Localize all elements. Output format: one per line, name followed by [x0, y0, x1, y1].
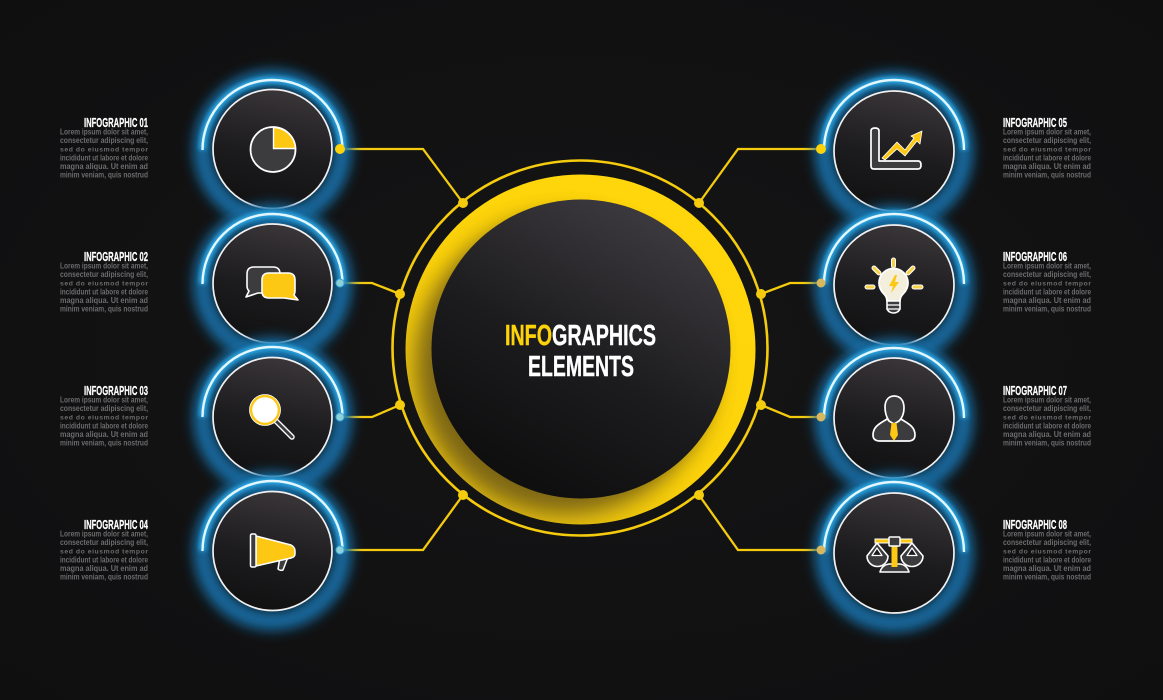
text block 02: minim veniam, quis nostrud	[60, 304, 148, 314]
disc shadow	[416, 214, 716, 514]
text block 04: INFOGRAPHIC 04	[84, 517, 148, 532]
text block 05	[1003, 115, 1091, 180]
text block 01: consectetur adipiscing elit,	[60, 136, 148, 145]
text block 02: INFOGRAPHIC 02	[84, 249, 148, 264]
text block 07: Lorem ipsum dolor sit amet,	[1003, 396, 1091, 404]
text block 06: Lorem ipsum dolor sit amet,	[1003, 262, 1091, 270]
text block 03: magna aliqua. Ut enim ad	[60, 430, 148, 439]
text block 02: magna aliqua. Ut enim ad	[60, 296, 148, 305]
text block 07: INFOGRAPHIC 07	[1003, 383, 1067, 398]
text block 05: minim veniam, quis nostrud	[1003, 170, 1091, 180]
inner dark disc	[432, 200, 730, 498]
node 2: chat	[202, 214, 344, 354]
icon: growth chart	[871, 128, 922, 169]
text block 08: minim veniam, quis nostrud	[1003, 572, 1091, 582]
text block 08: incididunt ut labore et dolore	[1003, 556, 1091, 564]
node 5: growth chart	[816, 80, 964, 221]
text block 05: magna aliqua. Ut enim ad	[1003, 162, 1091, 171]
title: GRAPHICS	[552, 320, 656, 352]
text block 07	[1003, 383, 1091, 448]
text block 08: magna aliqua. Ut enim ad	[1003, 564, 1091, 573]
text block 07: minim veniam, quis nostrud	[1003, 438, 1091, 448]
text block 01: INFOGRAPHIC 01	[84, 115, 148, 130]
central circle	[392, 160, 768, 536]
node 4: megaphone	[202, 481, 344, 621]
text block 06: incididunt ut labore et dolore	[1003, 288, 1091, 296]
text block 03	[60, 383, 148, 448]
text block 07: consectetur adipiscing elit,	[1003, 404, 1091, 413]
text block 04: incididunt ut labore et dolore	[60, 556, 148, 564]
text block 04: magna aliqua. Ut enim ad	[60, 564, 148, 573]
text block 04: minim veniam, quis nostrud	[60, 572, 148, 582]
node 3: magnifier	[202, 347, 344, 487]
text block 03: incididunt ut labore et dolore	[60, 422, 148, 430]
title	[505, 320, 656, 383]
text block 02: Lorem ipsum dolor sit amet,	[60, 262, 148, 270]
text block 05: consectetur adipiscing elit,	[1003, 136, 1091, 145]
icon: light bulb	[867, 260, 921, 313]
text block 05: incididunt ut labore et dolore	[1003, 154, 1091, 162]
text block 06	[1003, 249, 1091, 314]
text block 01: sed do eiusmod tempor	[60, 146, 148, 154]
text block 03: INFOGRAPHIC 03	[84, 383, 148, 398]
text block 01: Lorem ipsum dolor sit amet,	[60, 128, 148, 136]
node 6: light bulb	[816, 214, 964, 355]
title: INFO	[505, 320, 552, 352]
yellow disc	[406, 174, 756, 524]
text block 07: incididunt ut labore et dolore	[1003, 422, 1091, 430]
text block 02: consectetur adipiscing elit,	[60, 270, 148, 279]
text block 08: INFOGRAPHIC 08	[1003, 517, 1067, 532]
text block 05: Lorem ipsum dolor sit amet,	[1003, 128, 1091, 136]
node 7: businessman	[816, 348, 964, 488]
text block 05: sed do eiusmod tempor	[1003, 146, 1091, 154]
text block 07: magna aliqua. Ut enim ad	[1003, 430, 1091, 439]
icon: magnifying glass	[250, 394, 292, 437]
title: ELEMENTS	[528, 351, 634, 383]
text block 06: magna aliqua. Ut enim ad	[1003, 296, 1091, 305]
icon: speech bubbles	[246, 267, 298, 300]
text block 05: INFOGRAPHIC 05	[1003, 115, 1067, 130]
outer thin ring	[392, 160, 768, 536]
connector lines	[340, 149, 821, 550]
text block 01: minim veniam, quis nostrud	[60, 170, 148, 180]
text block 04: Lorem ipsum dolor sit amet,	[60, 530, 148, 538]
text block 01	[60, 115, 148, 180]
text block 03: sed do eiusmod tempor	[60, 414, 148, 422]
text block 03: minim veniam, quis nostrud	[60, 438, 148, 448]
text block 08: consectetur adipiscing elit,	[1003, 538, 1091, 547]
text block 08: Lorem ipsum dolor sit amet,	[1003, 530, 1091, 538]
text block 03: Lorem ipsum dolor sit amet,	[60, 396, 148, 404]
node 8: scales	[816, 482, 964, 623]
ring junction dots	[395, 198, 766, 500]
text block 02	[60, 249, 148, 314]
text block 02: incididunt ut labore et dolore	[60, 288, 148, 296]
text block 08	[1003, 517, 1091, 582]
icon: balance scales	[867, 537, 923, 572]
text block 06: minim veniam, quis nostrud	[1003, 304, 1091, 314]
text block 04: consectetur adipiscing elit,	[60, 538, 148, 547]
node 1: pie chart	[202, 79, 345, 219]
text block 08: sed do eiusmod tempor	[1003, 548, 1091, 556]
text block 01: incididunt ut labore et dolore	[60, 154, 148, 162]
text block 03: consectetur adipiscing elit,	[60, 404, 148, 413]
text block 06: consectetur adipiscing elit,	[1003, 270, 1091, 279]
text block 04: sed do eiusmod tempor	[60, 548, 148, 556]
text block 06: INFOGRAPHIC 06	[1003, 249, 1067, 264]
icon: businessman	[873, 396, 915, 441]
icon: pie chart	[250, 127, 296, 172]
text block 06: sed do eiusmod tempor	[1003, 280, 1091, 288]
icon: megaphone	[250, 534, 295, 570]
text block 02: sed do eiusmod tempor	[60, 280, 148, 288]
text block 01: magna aliqua. Ut enim ad	[60, 162, 148, 171]
text block 04	[60, 517, 148, 582]
text block 07: sed do eiusmod tempor	[1003, 414, 1091, 422]
